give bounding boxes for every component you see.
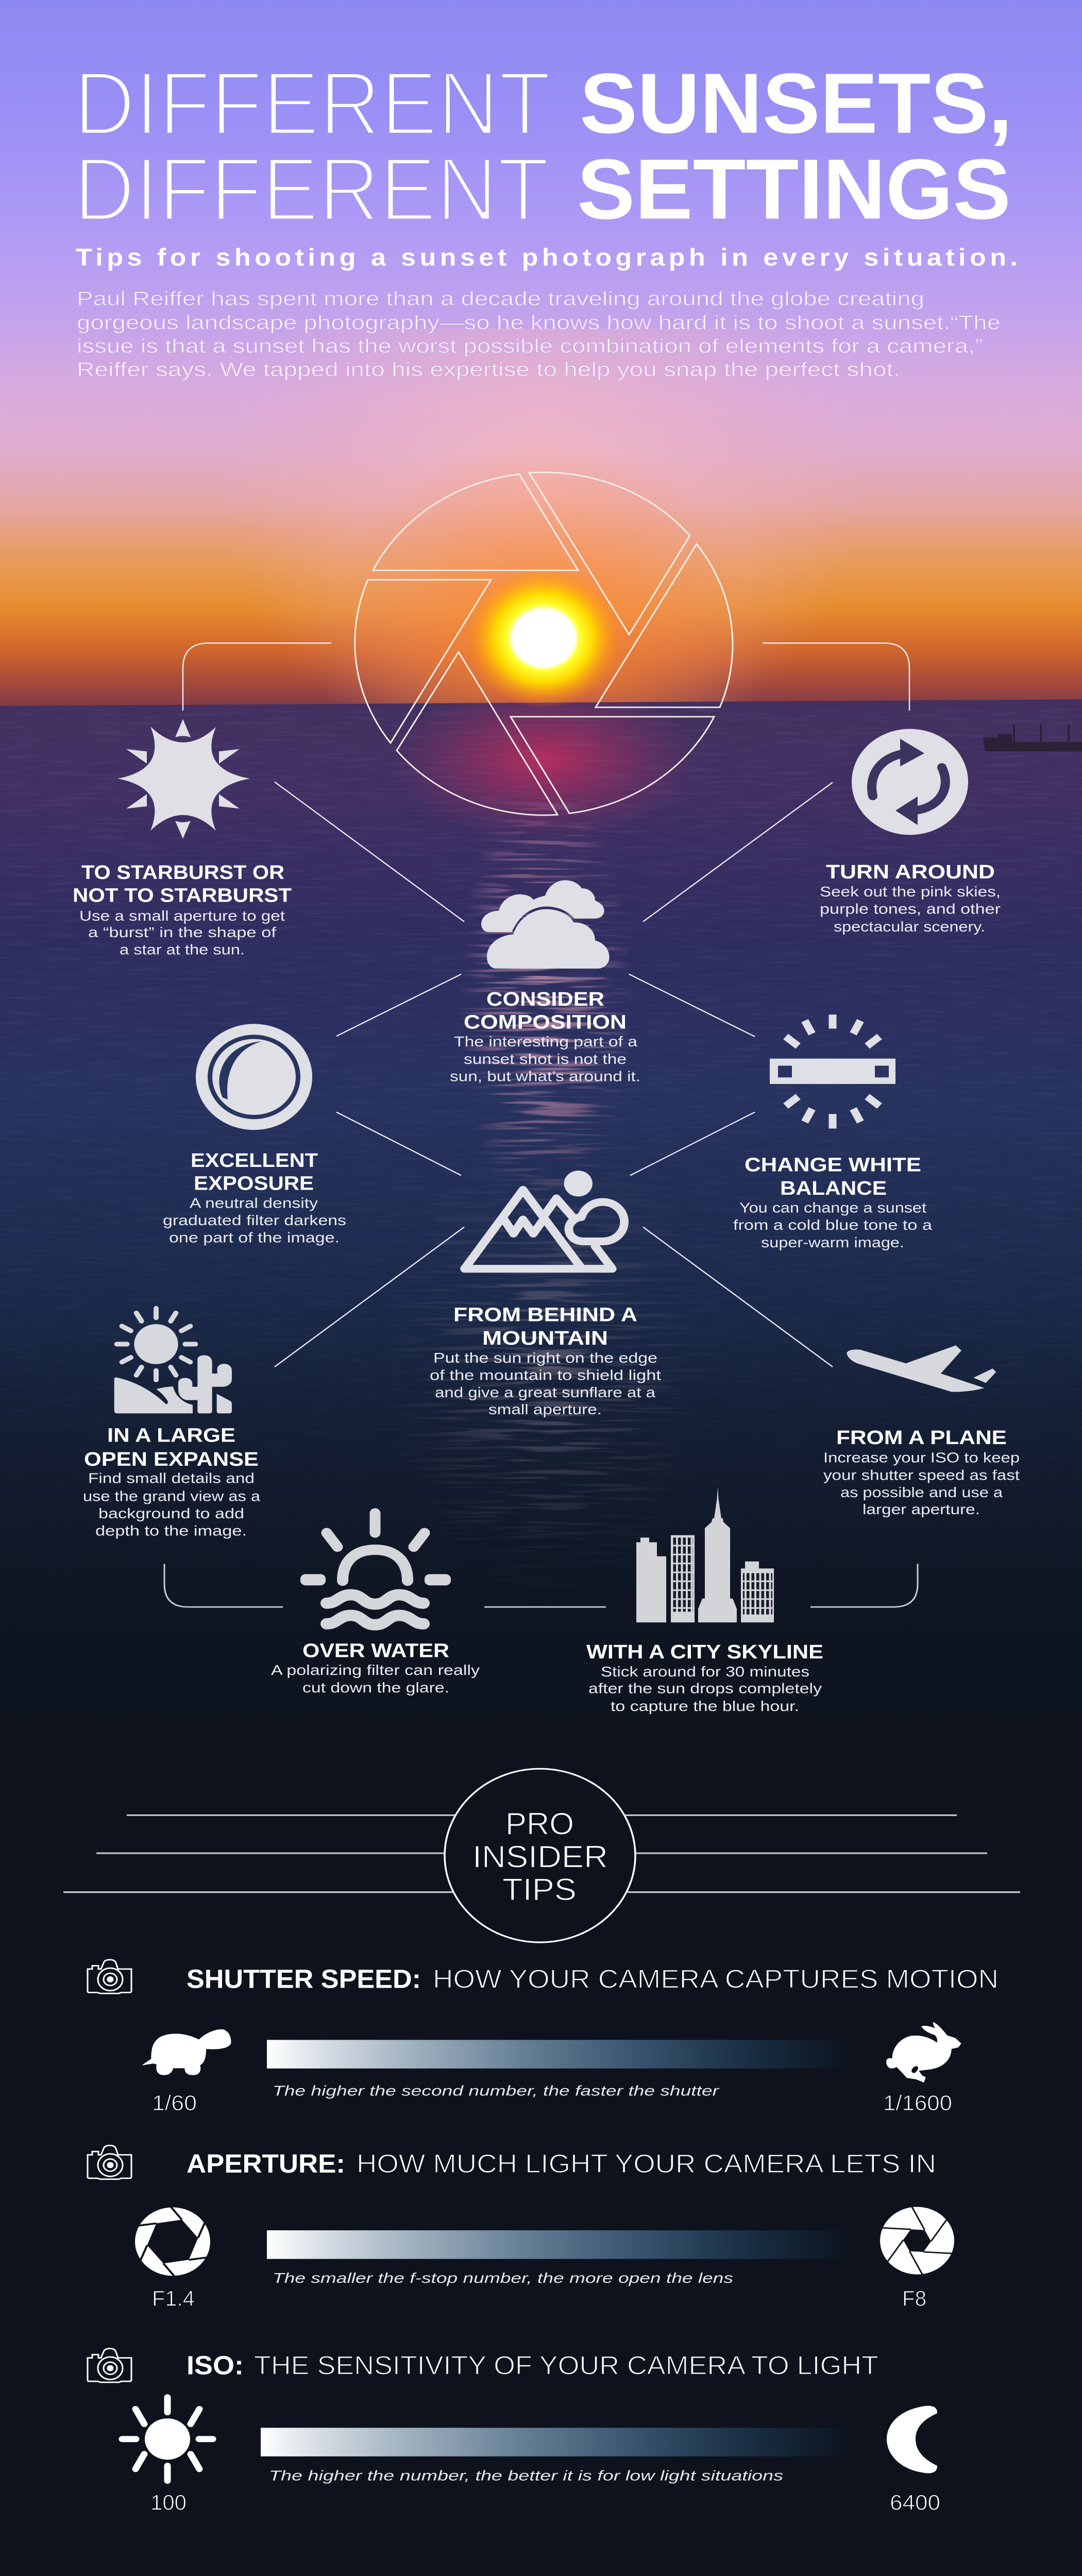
heading: NOT TO STARBURST bbox=[73, 884, 292, 906]
text: after the sun drops completely bbox=[588, 1681, 822, 1697]
heading bbox=[464, 988, 627, 1033]
value: F8: F8 bbox=[902, 2286, 926, 2311]
icon: sun bbox=[122, 2397, 213, 2481]
heading bbox=[187, 1965, 999, 1994]
text bbox=[823, 1450, 1020, 1517]
caption: The smaller the f-stop number, the more open the lens bbox=[273, 2270, 733, 2286]
heading: BALANCE bbox=[780, 1177, 887, 1199]
gradient bar bbox=[267, 2230, 852, 2259]
caption: The higher the second number, the faster the shutter bbox=[273, 2083, 720, 2099]
panel: over water bbox=[271, 1513, 480, 1696]
text: sun, but what’s around it. bbox=[450, 1069, 640, 1084]
panel: to starburst or not to starburst bbox=[73, 719, 292, 958]
icon: starburst bbox=[117, 719, 250, 839]
heading: INSIDER bbox=[472, 1840, 608, 1874]
title: SETTINGS bbox=[577, 141, 1011, 236]
text bbox=[271, 1663, 480, 1696]
panel: excellent exposure bbox=[163, 1024, 346, 1246]
heading: CHANGE WHITE bbox=[745, 1154, 921, 1176]
text: to capture the blue hour. bbox=[611, 1699, 799, 1715]
heading: IN A LARGE bbox=[107, 1424, 235, 1446]
panel: pro insider tips badge bbox=[63, 1769, 1020, 1942]
text: a star at the sun. bbox=[120, 942, 245, 958]
text: Find small details and bbox=[88, 1471, 255, 1486]
gradient bar bbox=[261, 2428, 852, 2456]
icon: turtle bbox=[142, 2029, 231, 2075]
heading: TO STARBURST OR bbox=[81, 861, 284, 884]
icon: camera bbox=[88, 1960, 131, 1993]
heading: PRO bbox=[505, 1807, 574, 1841]
icon: city skyline bbox=[636, 1487, 774, 1622]
heading bbox=[453, 1303, 637, 1349]
text: as possible and use a bbox=[840, 1485, 1003, 1501]
value: F1.4: F1.4 bbox=[152, 2286, 195, 2311]
panel: shutter speed bbox=[88, 1960, 999, 2115]
text: and give a great sunflare at a bbox=[435, 1385, 655, 1401]
heading: FROM BEHIND A bbox=[453, 1303, 637, 1326]
icon: clouds bbox=[481, 880, 610, 969]
icon: open aperture bbox=[135, 2207, 210, 2276]
heading: APERTURE: bbox=[187, 2149, 345, 2178]
heading: TURN AROUND bbox=[826, 861, 995, 883]
intro paragraph: gorgeous landscape photography—so he knows how hard it is to shoot a sunset.“The bbox=[77, 312, 1001, 334]
heading bbox=[84, 1424, 259, 1470]
icon: mountain and sun bbox=[465, 1171, 624, 1269]
text bbox=[820, 884, 1001, 935]
sun bbox=[466, 568, 621, 708]
heading bbox=[73, 861, 292, 906]
heading: MOUNTAIN bbox=[482, 1327, 608, 1349]
heading: WITH A CITY SKYLINE bbox=[586, 1641, 823, 1663]
intro paragraph bbox=[77, 287, 1001, 381]
icon: rotate arrows bbox=[852, 729, 968, 835]
intro paragraph: Paul Reiffer has spent more than a decade traveling around the globe creating bbox=[77, 287, 924, 310]
text: Use a small aperture to get bbox=[79, 908, 285, 924]
heading: FROM A PLANE bbox=[836, 1427, 1007, 1449]
panel: aperture bbox=[88, 2145, 954, 2311]
text: use the grand view as a bbox=[83, 1489, 260, 1504]
text: spectacular scenery. bbox=[834, 919, 985, 935]
text: from a cold blue tone to a bbox=[733, 1217, 932, 1233]
text: You can change a sunset bbox=[739, 1200, 926, 1216]
title: DIFFERENT bbox=[74, 139, 549, 240]
text: background to add bbox=[98, 1506, 244, 1522]
caption: The higher the number, the better it is for low light situations bbox=[269, 2468, 783, 2484]
icon: closed aperture bbox=[880, 2207, 954, 2275]
title: SUNSETS, bbox=[580, 55, 1012, 151]
text: one part of the image. bbox=[169, 1230, 340, 1246]
value: 100: 100 bbox=[150, 2491, 187, 2515]
subtitle: Tips for shooting a sunset photograph in every situation. bbox=[76, 243, 1018, 271]
text: sunset shot is not the bbox=[464, 1052, 627, 1067]
text bbox=[450, 1034, 640, 1084]
text: a “burst” in the shape of bbox=[88, 925, 277, 941]
heading: SHUTTER SPEED: bbox=[187, 1965, 421, 1994]
heading: CONSIDER bbox=[486, 988, 604, 1010]
icon: desert sun and cactus bbox=[114, 1308, 232, 1413]
icon: camera bbox=[88, 2145, 131, 2179]
heading: HOW MUCH LIGHT YOUR CAMERA LETS IN bbox=[357, 2149, 936, 2178]
heading bbox=[191, 1149, 318, 1194]
value: 6400: 6400 bbox=[890, 2491, 940, 2515]
text bbox=[430, 1350, 661, 1418]
text: depth to the image. bbox=[95, 1523, 247, 1539]
text: of the mountain to shield light bbox=[430, 1368, 661, 1383]
text: A polarizing filter can really bbox=[271, 1663, 480, 1679]
icon: ship on the horizon bbox=[983, 725, 1082, 751]
panel: consider composition bbox=[450, 880, 640, 1084]
text: cut down the glare. bbox=[302, 1680, 449, 1696]
icon: crescent moon bbox=[887, 2406, 937, 2473]
text: your shutter speed as fast bbox=[823, 1468, 1020, 1483]
panel: in a large open expanse bbox=[83, 1308, 260, 1539]
heading: OPEN EXPANSE bbox=[84, 1448, 259, 1470]
text: A neutral density bbox=[190, 1196, 318, 1211]
text: Increase your ISO to keep bbox=[823, 1450, 1020, 1466]
text bbox=[733, 1200, 932, 1250]
text bbox=[79, 908, 285, 958]
heading bbox=[745, 1154, 921, 1199]
intro paragraph: issue is that a sunset has the worst possible combination of elements for a camera,” bbox=[77, 335, 983, 357]
heading bbox=[472, 1807, 608, 1907]
panel: from a plane bbox=[823, 1345, 1020, 1517]
icon: white balance bbox=[770, 1014, 895, 1128]
panel: change white balance bbox=[733, 1014, 932, 1250]
panel: with a city skyline bbox=[586, 1487, 823, 1715]
title bbox=[74, 53, 1012, 240]
panel: turn around bbox=[820, 729, 1001, 935]
text: small aperture. bbox=[488, 1402, 602, 1418]
text bbox=[588, 1664, 822, 1715]
heading: HOW YOUR CAMERA CAPTURES MOTION bbox=[433, 1965, 999, 1994]
heading: EXCELLENT bbox=[191, 1149, 318, 1172]
heading: OVER WATER bbox=[302, 1639, 449, 1662]
text: purple tones, and other bbox=[820, 902, 1001, 917]
panel: from behind a mountain bbox=[430, 1171, 661, 1418]
value: 1/1600: 1/1600 bbox=[883, 2091, 952, 2115]
gradient bar bbox=[267, 2040, 852, 2069]
text bbox=[83, 1471, 260, 1539]
icon: lens filter bbox=[196, 1024, 312, 1130]
text bbox=[163, 1196, 346, 1246]
icon: sun over waves bbox=[300, 1513, 451, 1625]
text: Put the sun right on the edge bbox=[433, 1350, 657, 1366]
heading: TIPS bbox=[502, 1873, 577, 1907]
heading: THE SENSITIVITY OF YOUR CAMERA TO LIGHT bbox=[254, 2351, 878, 2380]
text: Seek out the pink skies, bbox=[820, 884, 1001, 900]
icon: rabbit bbox=[886, 2022, 961, 2082]
heading: COMPOSITION bbox=[464, 1011, 627, 1033]
icon: camera bbox=[88, 2348, 131, 2382]
icon: large aperture outline bbox=[355, 472, 733, 815]
text: The interesting part of a bbox=[454, 1034, 637, 1050]
heading: ISO: bbox=[187, 2351, 244, 2380]
text: Stick around for 30 minutes bbox=[601, 1664, 809, 1680]
connector lines between tips bbox=[164, 643, 918, 1607]
intro paragraph: Reiffer says. We tapped into his expertise to help you snap the perfect shot. bbox=[77, 359, 900, 381]
text: super-warm image. bbox=[761, 1235, 904, 1250]
value: 1/60: 1/60 bbox=[152, 2091, 197, 2115]
panel: iso bbox=[88, 2348, 940, 2515]
text: larger aperture. bbox=[863, 1502, 980, 1517]
heading: EXPOSURE bbox=[194, 1172, 314, 1194]
icon: airplane bbox=[847, 1345, 996, 1392]
title: DIFFERENT bbox=[74, 53, 551, 154]
text: graduated filter darkens bbox=[163, 1213, 346, 1229]
